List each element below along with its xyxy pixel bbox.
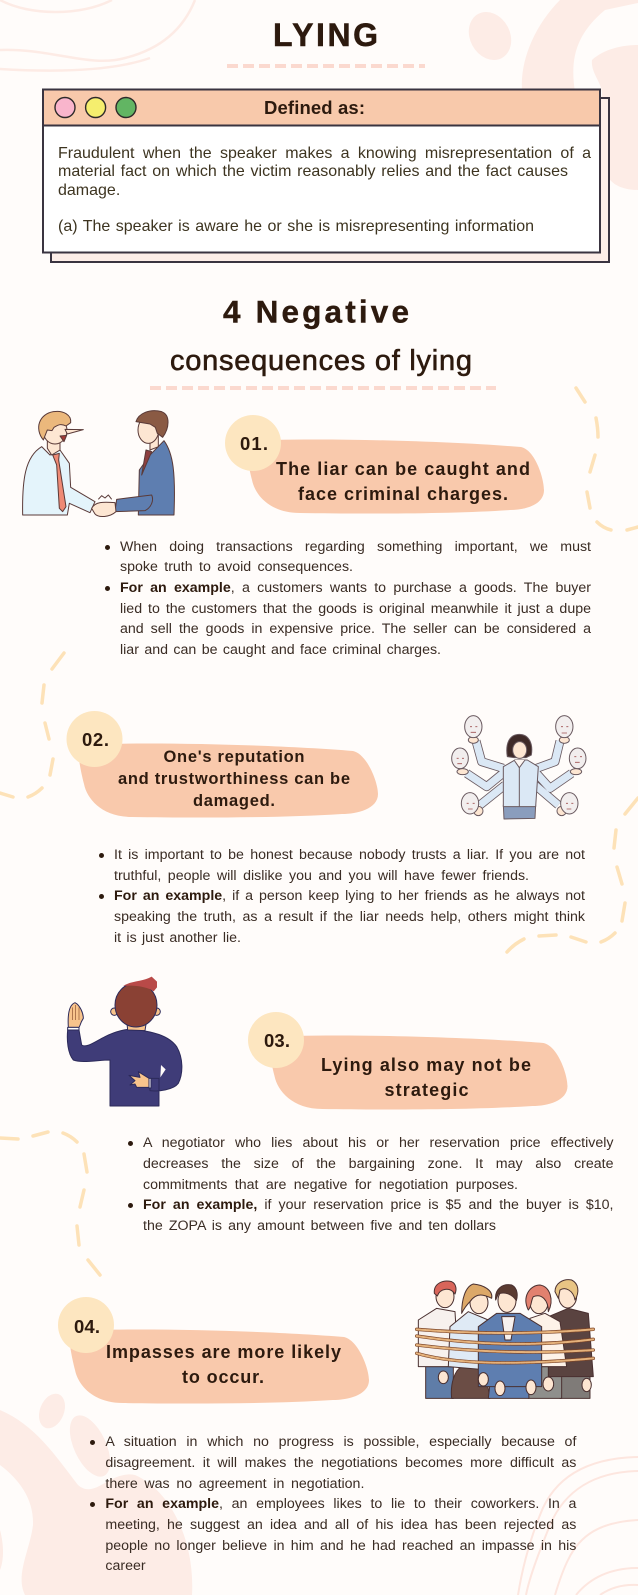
text block: consequence 01 bullets: liar and can be caught and face criminal charges. (120, 642, 441, 658)
illustration: man with fingers crossed behind back (67, 977, 182, 1106)
panel: consequence 01 badge (225, 415, 544, 514)
heading: consequence 03: Lying also may not be (321, 1055, 531, 1075)
panel: consequence 01 badge: 01. (240, 433, 268, 454)
panel: consequence 03 badge: 03. (264, 1030, 290, 1051)
panel: consequence 02 badge: 02. (82, 729, 109, 750)
text block: consequence 02 bullets: It is important to be honest because nobody trusts a liar. If you are not (114, 847, 585, 863)
background decoration: bottom-left organic shape (0, 1390, 192, 1595)
text block: consequence 01 bullets: and sell the goods in expensive price. The seller can be considered a (120, 621, 591, 637)
text block: consequence 03 bullets: A negotiator who lies about his or her reservation price effectively (143, 1135, 614, 1151)
text block: consequence 04 bullets: For an example, an employees likes to lie to their coworkers. In a (105, 1496, 576, 1512)
text block: consequence 02 bullets: speaking the truth, as a result if the liar needs help, others might think (114, 909, 585, 925)
heading: consequence 01: The liar can be caught and (276, 459, 530, 479)
text block: consequence 04 bullets: career (105, 1558, 146, 1574)
dashed path decorations (0, 388, 638, 1275)
text block: consequence 03 bullets (128, 1135, 614, 1234)
heading: 4 Negative consequences of lying: consequences of lying (170, 345, 472, 377)
heading: consequence 01 (276, 459, 530, 504)
illustration: five coworkers tied with rope (417, 1280, 593, 1398)
title: LYING: LYING (273, 17, 378, 53)
heading: consequence 04: to occur. (182, 1367, 264, 1387)
text block: consequence 01 bullets: For an example, a customers wants to purchase a goods. The buyer (120, 580, 591, 596)
text block: consequence 02 bullets: For an example, if a person keep lying to her friends as he always not (114, 888, 585, 904)
illustration: woman holding six masks (452, 716, 586, 819)
background decoration: top-right organic shape (461, 0, 638, 190)
heading: 4 Negative consequences of lying (150, 294, 496, 388)
panel: consequence 03 badge (248, 1012, 568, 1110)
text block: definition: material fact on which the victim reasonably relies and the fact causes (58, 163, 568, 180)
heading: 4 Negative consequences of lying: 4 Negative (223, 294, 409, 330)
text block: consequence 03 bullets: the ZOPA is any amount between five and ten dollars (143, 1218, 496, 1234)
panel: definition window (43, 90, 609, 262)
text block: consequence 01 bullets: When doing transactions regarding something important, we must (120, 539, 591, 555)
text block: consequence 03 bullets: decreases the size of the bargaining zone. It may also create (143, 1156, 614, 1172)
text block: definition: (a) The speaker is aware he or she is misrepresenting information (58, 218, 534, 235)
heading: consequence 02: damaged. (193, 792, 275, 810)
heading: consequence 01: face criminal charges. (298, 484, 508, 504)
heading: consequence 03 (321, 1055, 531, 1100)
text block: consequence 04 bullets: A situation in which no progress is possible, especially because of (105, 1434, 576, 1450)
text block: consequence 03 bullets: commitments that are negative for negotiation purposes. (143, 1177, 518, 1193)
text block: consequence 01 bullets (105, 539, 591, 658)
text block: definition (58, 144, 592, 235)
text block: consequence 01 bullets: lied to the customers that the goods is original meanwhile it just a dupe (120, 601, 591, 617)
panel: consequence 04 badge (58, 1297, 369, 1404)
text block: consequence 02 bullets (99, 847, 585, 946)
text block: consequence 04 bullets: disagreement. it will makes the negotiations becomes more difficult as (105, 1455, 576, 1471)
heading: consequence 03: strategic (384, 1080, 468, 1100)
text block: definition: damage. (58, 182, 120, 199)
text block: consequence 04 bullets: people no longer believe in him and he had reached an impasse in his (105, 1538, 576, 1554)
text block: consequence 02 bullets: truthful, people will dislike you and you will have fewer friends. (114, 868, 529, 884)
icon: window buttons (55, 98, 136, 118)
text block: definition: Fraudulent when the speaker makes a knowing misrepresentation of a (58, 144, 591, 162)
panel: consequence 04 badge: 04. (74, 1316, 100, 1337)
heading: consequence 04: Impasses are more likely (106, 1342, 341, 1362)
text block: consequence 04 bullets (90, 1434, 576, 1574)
heading: consequence 02: One's reputation (164, 748, 304, 766)
background decoration: bottom-right swirl lines (518, 1457, 638, 1595)
heading: consequence 04 (106, 1342, 341, 1387)
text block: consequence 03 bullets: For an example, if your reservation price is $5 and the buyer is $10, (143, 1197, 614, 1213)
panel: consequence 02 badge (66, 711, 378, 818)
heading: consequence 02 (118, 748, 350, 810)
text block: consequence 02 bullets: it is just another lie. (114, 930, 241, 946)
heading: Defined as: Defined as: (264, 97, 365, 118)
illustration: liar with long nose shaking hands (23, 411, 174, 517)
background decoration: top-left swirl lines (0, 0, 195, 71)
text block: consequence 04 bullets: there was no agreement in negotiation. (105, 1476, 364, 1492)
text block: consequence 04 bullets: meeting, he suggest an idea and all of his idea has been rejected as (105, 1517, 576, 1533)
heading: consequence 02: and trustworthiness can be (118, 770, 350, 788)
text block: consequence 01 bullets: spoke truth to avoid consequences. (120, 559, 353, 575)
